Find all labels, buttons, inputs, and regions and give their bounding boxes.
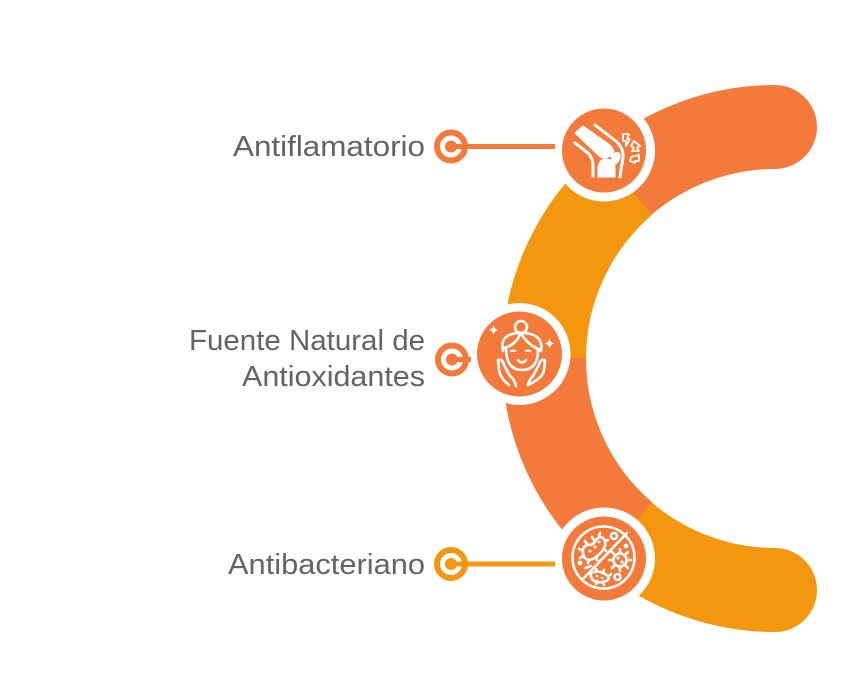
connector: Antibacteriano [437, 550, 555, 578]
icon: knee joint [553, 100, 655, 202]
label: Fuente Natural de Antioxidantes: Antioxidantes [242, 361, 425, 393]
label: Antiflamatorio: Antiflamatorio [233, 131, 425, 163]
label: Fuente Natural de Antioxidantes: Fuente Natural de [189, 325, 425, 357]
arc segment: lower coral [544, 358, 624, 534]
icon: face care [468, 303, 570, 405]
label: Fuente Natural de Antioxidantes [189, 325, 425, 393]
connector: Antiflamatorio [437, 132, 555, 160]
connector: Antioxidantes [438, 346, 471, 374]
arc band [544, 127, 775, 590]
label: Antibacteriano: Antibacteriano [228, 549, 425, 581]
arc segment: upper amber [544, 183, 624, 358]
icon: no bacteria [553, 508, 655, 610]
arc segment: top coral [624, 127, 775, 183]
arc segment: bottom amber [624, 534, 775, 590]
